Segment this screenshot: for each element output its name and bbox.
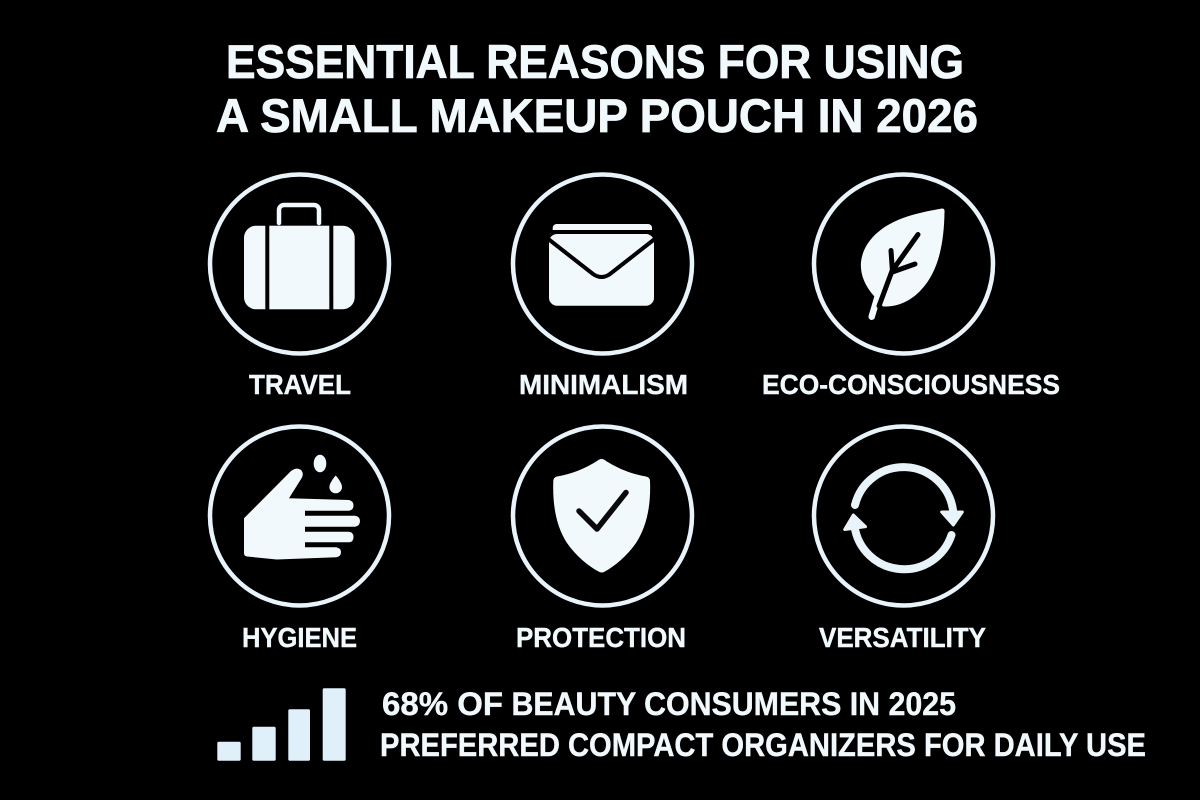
icon: hand with drops (244, 455, 360, 560)
statistic callout: BEAUTY CONSUMERS IN 2025 (512, 686, 956, 722)
bar chart icon (217, 688, 346, 761)
panel: travel (210, 174, 389, 400)
icon: circular arrows (845, 467, 962, 569)
title (216, 35, 978, 142)
panel: minimalism (513, 174, 692, 400)
label: travel: TRAVEL (249, 369, 351, 400)
icon: shield with check (553, 459, 650, 572)
panel: protection (513, 426, 692, 653)
label: versatility: VERSATILITY (819, 622, 986, 653)
label: hygiene: HYGIENE (242, 622, 357, 653)
label: protection: PROTECTION (516, 622, 686, 653)
statistic callout (380, 686, 1146, 763)
title: A SMALL MAKEUP POUCH IN 2026 (216, 89, 978, 142)
title: ESSENTIAL REASONS FOR USING (226, 35, 964, 88)
icon: leaf (861, 208, 945, 317)
panel: hygiene (210, 426, 389, 653)
icon: envelope (547, 224, 656, 306)
panel: versatility (814, 426, 993, 653)
label: minimalism: MINIMALISM (519, 369, 688, 400)
icon: suitcase (244, 205, 355, 309)
statistic callout: PREFERRED COMPACT ORGANIZERS FOR DAILY USE (380, 727, 1146, 763)
panel: eco-consciousness (762, 174, 1060, 400)
statistic callout: 68% OF (382, 686, 503, 722)
label: eco-consciousness: ECO-CONSCIOUSNESS (762, 369, 1060, 400)
